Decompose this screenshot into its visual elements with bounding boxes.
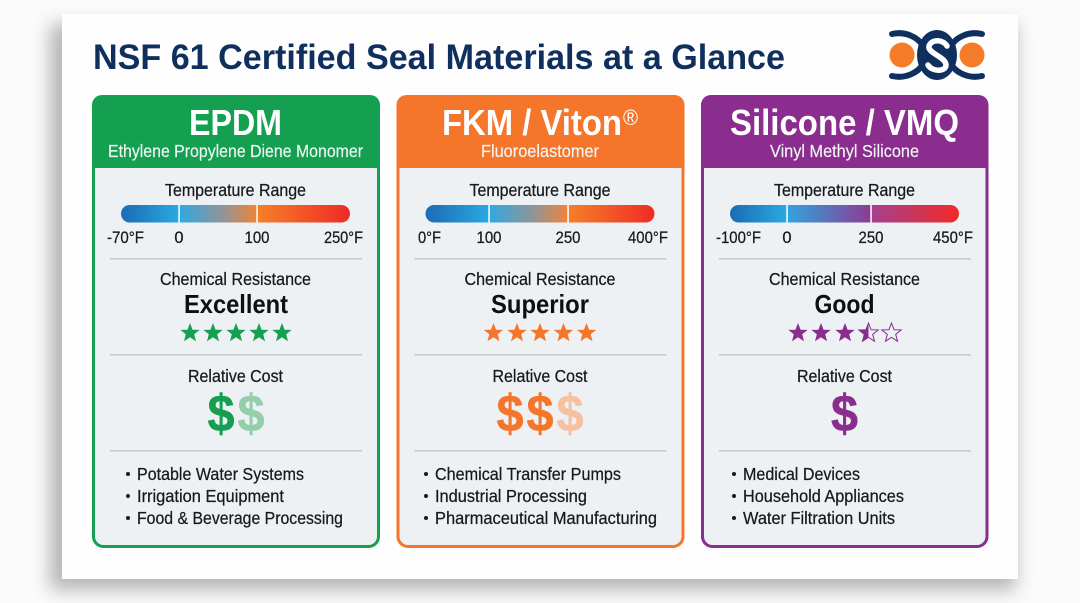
FKM chemical resistance: Superior: [491, 289, 589, 319]
EPDM temperature range: Temperature Range: [165, 180, 306, 200]
EPDM relative cost: $: [208, 385, 235, 443]
Silicone relative cost: [797, 366, 892, 443]
EPDM chemical resistance: Excellent: [184, 289, 288, 319]
FKM chemical resistance: Chemical Resistance: [464, 269, 616, 289]
Silicone chemical resistance: Good: [814, 289, 874, 319]
FKM temperature range: Temperature Range: [470, 180, 610, 200]
FKM relative cost: [492, 366, 588, 443]
FKM applications: Pharmaceutical Manufacturing: [435, 508, 657, 528]
Silicone header: [701, 95, 988, 168]
FKM header: Fluoroelastomer: [481, 141, 599, 161]
panel: FKM / Viton: [396, 95, 684, 546]
FKM temperature range: 100: [476, 229, 502, 247]
FKM temperature range: 250: [556, 229, 580, 247]
panel: Silicone / VMQ: [701, 95, 988, 546]
EPDM applications: Potable Water Systems: [137, 464, 304, 484]
EPDM header: Ethylene Propylene Diene Monomer: [108, 141, 363, 161]
Silicone chemical resistance: Chemical Resistance: [769, 269, 920, 289]
FKM applications: Industrial Processing: [435, 486, 587, 506]
FKM applications: Chemical Transfer Pumps: [435, 464, 621, 484]
FKM header: [396, 95, 684, 168]
Silicone temperature range: 250: [858, 229, 884, 247]
EPDM applications: [126, 464, 343, 528]
EPDM temperature range: 250°F: [324, 229, 363, 247]
FKM temperature range: [418, 184, 668, 244]
Silicone temperature range: -100°F: [716, 229, 761, 247]
EPDM applications: Irrigation Equipment: [137, 486, 284, 506]
EPDM applications: Food & Beverage Processing: [137, 508, 343, 528]
FKM header: FKM / Viton: [442, 102, 622, 143]
EPDM temperature range: [108, 184, 363, 244]
EPDM temperature range: -70°F: [107, 229, 144, 247]
Silicone applications: Water Filtration Units: [743, 508, 895, 528]
EPDM chemical resistance: [160, 269, 311, 341]
EPDM header: EPDM: [189, 102, 282, 143]
Silicone header: Silicone / VMQ: [730, 102, 959, 143]
FKM relative cost: Relative Cost: [492, 366, 588, 386]
FKM relative cost: $: [556, 385, 584, 443]
FKM chemical resistance: [464, 269, 616, 341]
panel: EPDM: [92, 95, 380, 546]
Silicone relative cost: Relative Cost: [797, 366, 892, 386]
Silicone relative cost: $: [831, 385, 858, 443]
EPDM chemical resistance: Chemical Resistance: [160, 269, 311, 289]
FKM header: ®: [623, 105, 638, 130]
Silicone temperature range: 450°F: [933, 229, 973, 247]
Silicone temperature range: Temperature Range: [774, 180, 915, 200]
title: NSF 61 Certified Seal Materials at a Glance: [93, 38, 785, 77]
EPDM header: [92, 95, 380, 168]
FKM relative cost: $: [526, 385, 554, 443]
EPDM relative cost: Relative Cost: [188, 366, 283, 386]
logo: [890, 30, 984, 80]
EPDM temperature range: 0: [174, 229, 184, 247]
Silicone header: Vinyl Methyl Silicone: [770, 141, 919, 161]
FKM temperature range: 400°F: [628, 229, 668, 247]
Silicone applications: Household Appliances: [743, 486, 904, 506]
FKM relative cost: $: [496, 385, 524, 443]
EPDM relative cost: [188, 366, 283, 443]
Silicone temperature range: [716, 184, 972, 244]
Silicone temperature range: 0: [782, 229, 792, 247]
Silicone applications: [732, 464, 904, 528]
Silicone chemical resistance: [769, 269, 920, 341]
EPDM temperature range: 100: [244, 229, 270, 247]
EPDM relative cost: $: [238, 385, 265, 443]
FKM temperature range: 0°F: [418, 229, 441, 247]
Silicone applications: Medical Devices: [743, 464, 860, 484]
FKM applications: [424, 464, 657, 528]
